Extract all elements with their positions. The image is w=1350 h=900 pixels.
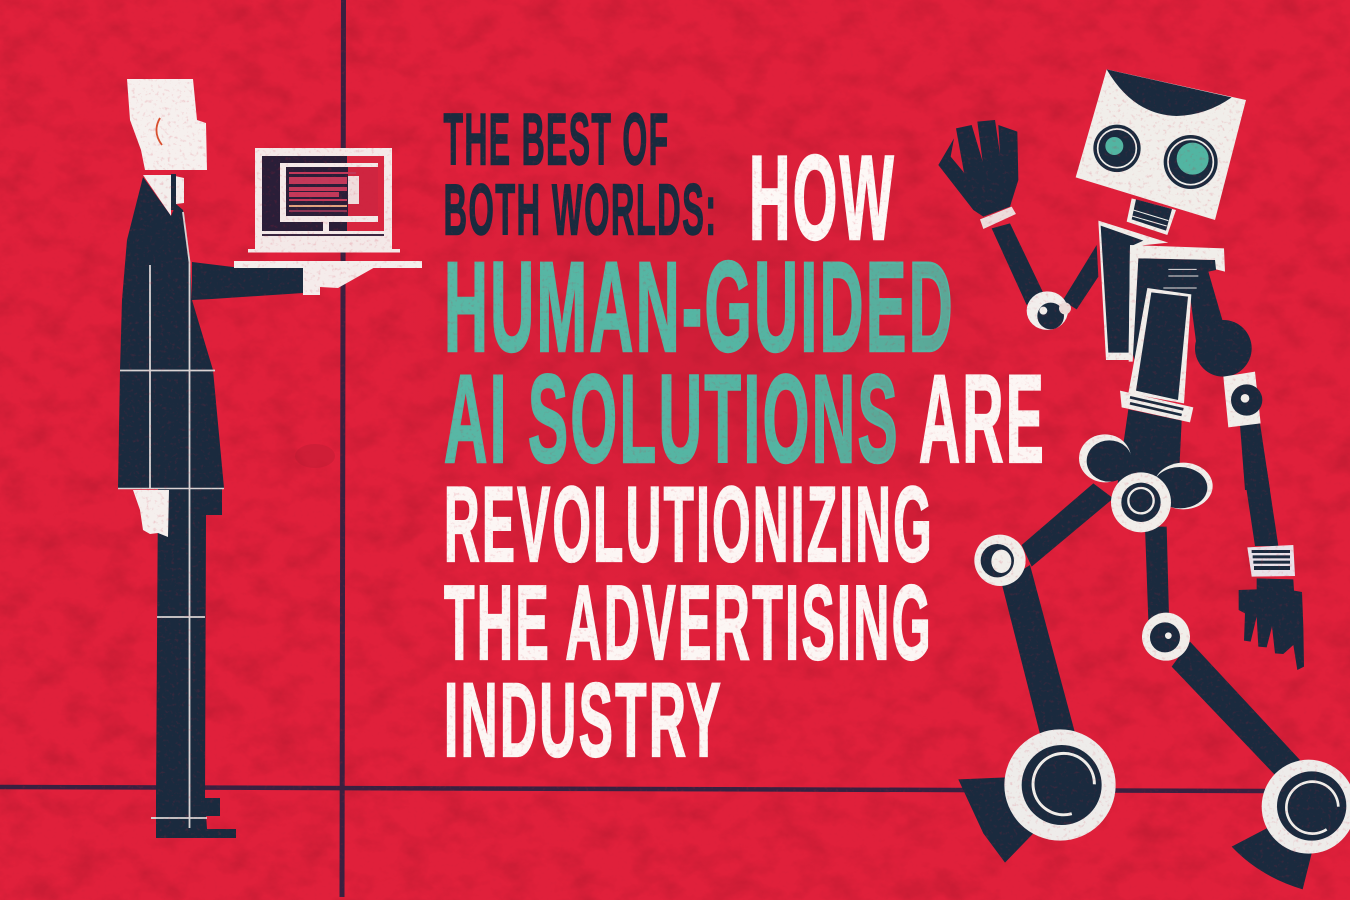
robot hip joint (1111, 472, 1171, 532)
robot forearm (1243, 468, 1278, 546)
lower hand (133, 490, 169, 537)
robot hip right blob (1153, 463, 1213, 509)
robot right knee (1142, 613, 1190, 661)
sleeve arm (192, 262, 303, 300)
suit seam lines (118, 212, 224, 828)
kicker: the best of both worlds (444, 100, 718, 250)
robot lowered hand (1239, 578, 1304, 670)
shoes (156, 798, 236, 838)
laptop (248, 148, 400, 252)
robot left foot (958, 777, 1033, 863)
tie (171, 174, 176, 210)
headline: human-guided ai solutions (444, 236, 955, 489)
robot left thigh (1022, 483, 1113, 567)
vertical wall line (342, 0, 344, 897)
robot shoulder band (1223, 372, 1262, 427)
robot waist (1117, 409, 1182, 490)
illustration: walking robot upper body (938, 69, 1270, 490)
headline: are revolutionizing the advertising industry (444, 350, 1046, 779)
infographic canvas: ARE (919, 350, 1046, 489)
legs (156, 488, 222, 800)
title text block: BOTH WORLDS: (444, 170, 718, 250)
robot right thigh (1145, 527, 1169, 620)
robot left knee (974, 535, 1026, 586)
illustration: walking robot lower body (958, 463, 1350, 889)
serving hand (303, 264, 377, 295)
jacket (118, 177, 224, 488)
shirt collar (143, 175, 184, 216)
robot left shin (1002, 565, 1076, 737)
robot raised arm (992, 223, 1098, 309)
seam over shoes (151, 800, 207, 828)
headline: are revolutionizing the advertising industry: INDUSTRY (444, 662, 723, 779)
title text block: HOW (749, 131, 896, 265)
illustration: man in suit with laptop on tray (118, 79, 422, 838)
robot neck (1127, 198, 1176, 235)
tray (234, 261, 422, 268)
robot belt (1120, 391, 1193, 422)
robot right shin (1172, 642, 1300, 775)
robot left wheel (1004, 729, 1116, 841)
robot lowered upper arm (1240, 423, 1270, 490)
robot bracelet (1247, 545, 1295, 577)
robot right eye (1164, 135, 1218, 189)
robot hip left blob (1079, 434, 1132, 482)
robot head (1076, 69, 1246, 220)
title text block (444, 100, 1046, 779)
robot right wheel (1262, 760, 1350, 854)
robot raised hand (938, 120, 1018, 217)
horizontal floor line (0, 787, 1265, 791)
head (127, 79, 207, 170)
robot right foot (1232, 827, 1312, 889)
robot elbow joint (1027, 291, 1071, 330)
kicker: the best of both worlds: THE BEST OF (444, 100, 670, 180)
robot left eye (1093, 125, 1141, 172)
robot torso (1128, 245, 1252, 403)
robot chest left panel (1098, 221, 1168, 360)
ear (156, 118, 162, 145)
robot wrist band (980, 207, 1016, 229)
